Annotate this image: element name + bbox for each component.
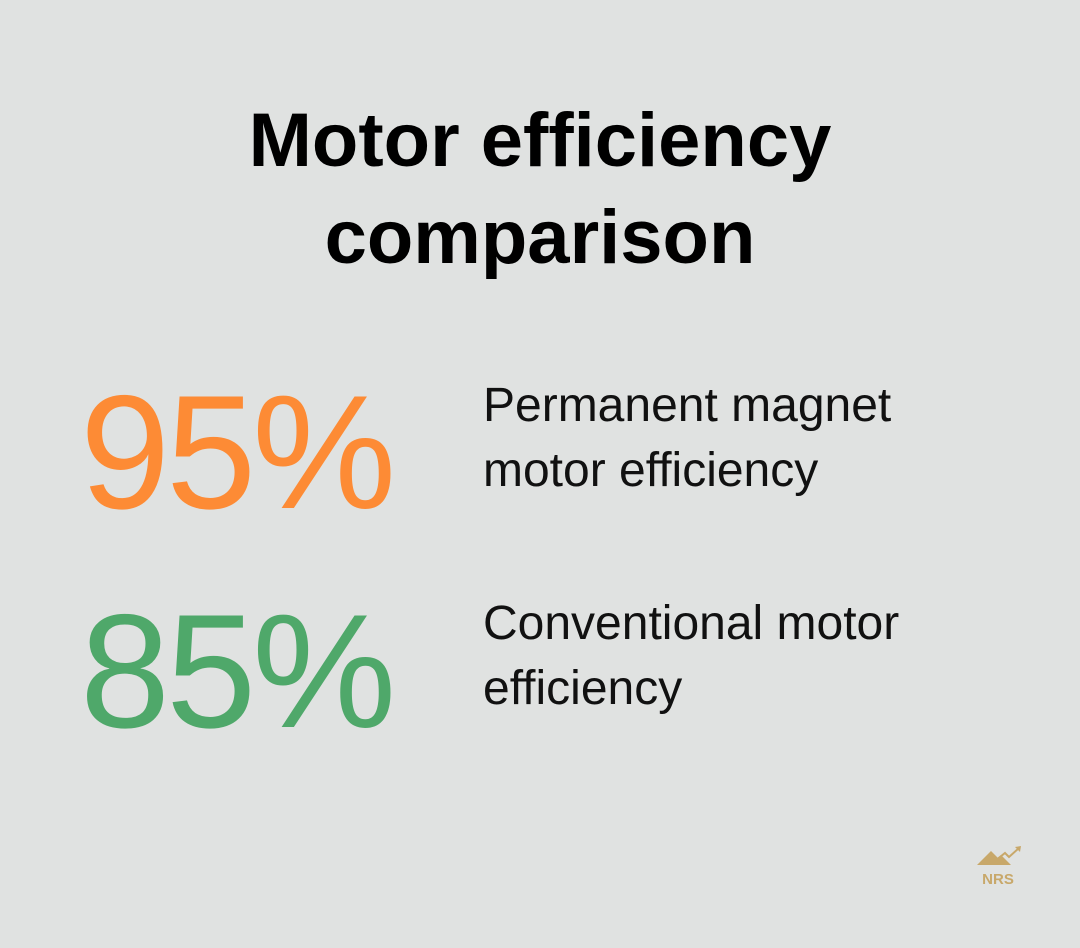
stat: 85%: 85% xyxy=(80,581,392,762)
stat: 95%: 95% xyxy=(80,362,392,543)
title xyxy=(249,98,831,280)
label: permanent magnet xyxy=(483,379,891,497)
title: comparison xyxy=(325,195,755,280)
label: permanent magnet: motor efficiency xyxy=(483,444,818,497)
title: Motor efficiency xyxy=(249,98,831,183)
logo: NRS xyxy=(977,846,1021,888)
label: conventional: efficiency xyxy=(483,662,682,715)
label: conventional xyxy=(483,597,899,715)
label: conventional: Conventional motor xyxy=(483,597,899,650)
label: permanent magnet: Permanent magnet xyxy=(483,379,891,432)
logo: NRS: NRS xyxy=(982,871,1014,888)
